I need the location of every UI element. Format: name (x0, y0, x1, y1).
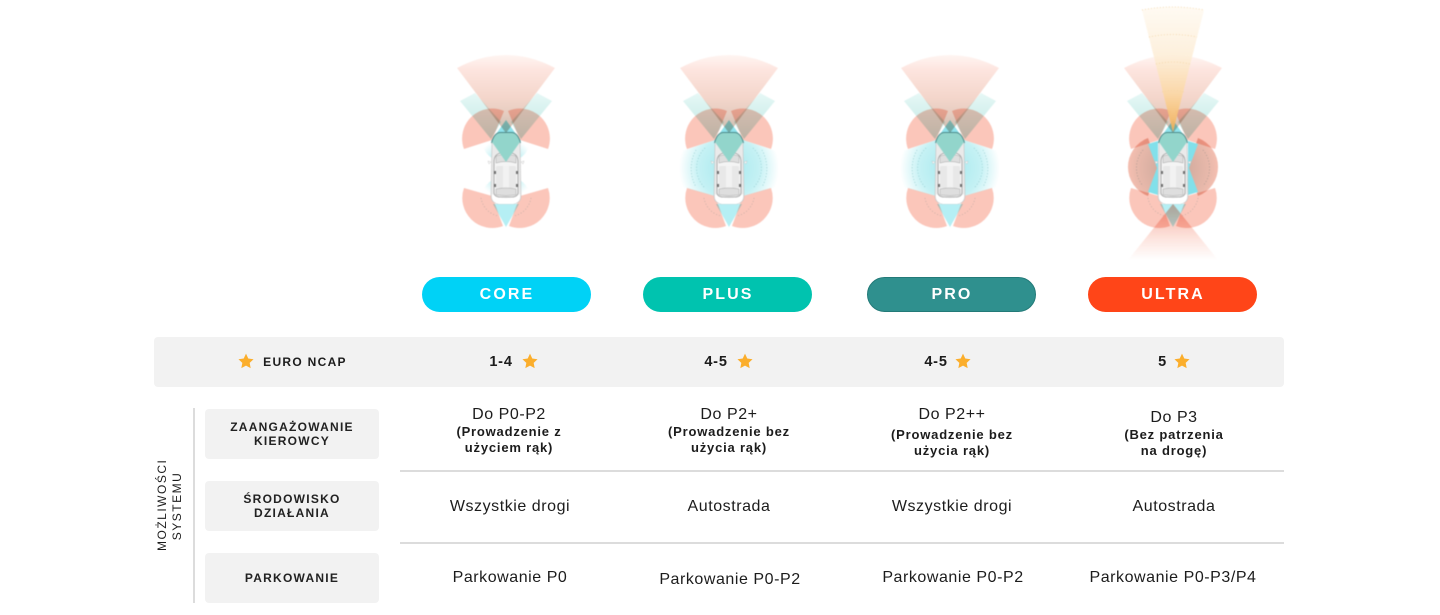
rating PRO: 4-5 (924, 354, 948, 370)
rotated heading: system capabilities (154, 458, 184, 550)
tier pill: PRO: PRO (932, 286, 972, 303)
engagement PLUS (668, 406, 790, 455)
tier pill: CORE: CORE (480, 286, 534, 303)
icon: star ULTRA (1174, 354, 1190, 368)
engagement PLUS: Do P2+ (700, 406, 758, 423)
engagement PRO: użycia rąk) (914, 443, 990, 458)
tier pill: ULTRA: ULTRA (1141, 286, 1205, 303)
row label: operating environment (205, 481, 379, 531)
car diagram: ULTRA (1124, 7, 1222, 260)
Euro NCAP label: EURO NCAP (263, 355, 347, 369)
engagement PLUS: (Prowadzenie bez (668, 424, 790, 439)
tier pill: CORE (422, 277, 591, 312)
engagement CORE: użyciem rąk) (465, 440, 553, 455)
engagement ULTRA (1124, 409, 1224, 458)
rating PLUS: 4-5 (704, 354, 728, 370)
engagement PRO: (Prowadzenie bez (891, 427, 1013, 442)
engagement ULTRA: (Bez patrzenia (1124, 427, 1224, 442)
parking PRO: Parkowanie P0-P2 (882, 569, 1024, 586)
engagement CORE: Do P0-P2 (472, 406, 546, 423)
engagement PRO: Do P2++ (918, 406, 986, 423)
row label: operating environment: DZIAŁANIA (254, 506, 330, 520)
row label: driver engagement (205, 409, 379, 459)
environment CORE: Wszystkie drogi (450, 498, 570, 515)
parking CORE: Parkowanie P0 (453, 569, 567, 586)
icon: star PRO (956, 354, 970, 368)
row label: driver engagement: KIEROWCY (254, 434, 330, 448)
car diagram: PLUS (676, 55, 782, 228)
row label: driver engagement: ZAANGAŻOWANIE (230, 420, 354, 434)
engagement CORE (456, 406, 562, 455)
row label: parking (205, 553, 379, 603)
rating ULTRA: 5 (1158, 354, 1167, 370)
sensor coverage illustrations (457, 6, 1222, 254)
environment PLUS: Autostrada (688, 498, 770, 515)
engagement PLUS: użycia rąk) (691, 440, 767, 455)
icon: star CORE (522, 354, 538, 368)
rating CORE: 1-4 (489, 354, 513, 370)
environment PRO: Wszystkie drogi (892, 498, 1012, 515)
engagement CORE: (Prowadzenie z (456, 424, 562, 439)
tier pill: PLUS: PLUS (702, 286, 754, 303)
icon: star PLUS (738, 354, 752, 368)
engagement ULTRA: na drogę) (1141, 443, 1207, 458)
parking ULTRA: Parkowanie P0-P3/P4 (1090, 569, 1256, 586)
Euro NCAP row (154, 337, 1284, 387)
row label: operating environment: ŚRODOWISKO (243, 492, 341, 506)
rotated heading: system capabilities: MOŻLIWOŚCI (154, 458, 168, 550)
row label: parking: PARKOWANIE (245, 571, 339, 585)
engagement PRO (891, 406, 1013, 458)
environment ULTRA: Autostrada (1133, 498, 1215, 515)
engagement ULTRA: Do P3 (1150, 409, 1198, 426)
parking PLUS: Parkowanie P0-P2 (659, 571, 801, 588)
tier pill: PLUS (643, 277, 812, 312)
rotated heading: system capabilities: SYSTEMU (170, 471, 184, 540)
car diagram: PRO (896, 55, 1004, 228)
tier pill: ULTRA (1088, 277, 1257, 312)
tier pill: PRO (867, 277, 1036, 312)
icon: star Euro NCAP (238, 354, 254, 368)
car diagram: CORE (457, 55, 555, 228)
